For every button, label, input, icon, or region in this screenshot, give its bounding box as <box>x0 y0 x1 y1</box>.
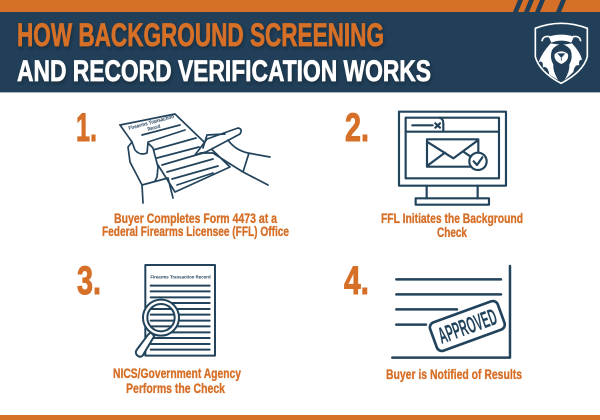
icon: document with magnifier <box>136 265 215 357</box>
caption 4: Buyer is Notified of Results <box>386 366 522 382</box>
bottom bar <box>0 415 600 420</box>
number 4: 4. <box>344 259 369 303</box>
icon: signing form <box>120 114 270 203</box>
icon: signing form: Record <box>147 124 161 133</box>
caption 3 <box>113 365 241 396</box>
icon: monitor with envelope <box>399 112 506 205</box>
caption 2: FFL Initiates the Background <box>381 210 523 226</box>
icon: signing form: Firearms Transaction <box>128 114 175 132</box>
step 4 <box>344 259 522 382</box>
step 1 <box>76 106 289 239</box>
icon: bear shield logo <box>535 23 587 83</box>
caption 1: Federal Firearms Licensee (FFL) Office <box>102 223 289 239</box>
caption 3: NICS/Government Agency <box>113 365 241 381</box>
caption 1 <box>102 210 289 239</box>
icon: document with magnifier: Firearms Transaction Record <box>150 274 211 279</box>
step 2 <box>345 106 523 240</box>
icon: approved stamp document: APPROVED <box>434 304 500 349</box>
title: AND RECORD VERIFICATION WORKS <box>17 55 431 88</box>
step 3 <box>77 259 241 396</box>
title: HOW BACKGROUND SCREENING <box>17 17 384 53</box>
number 2: 2. <box>345 106 369 150</box>
title <box>17 17 431 88</box>
caption 2 <box>381 210 523 240</box>
caption 3: Performs the Check <box>126 380 225 396</box>
caption 1: Buyer Completes Form 4473 at a <box>114 210 277 226</box>
icon: approved stamp document <box>392 266 510 358</box>
number 3: 3. <box>77 259 101 303</box>
number 1: 1. <box>76 106 97 150</box>
caption 2: Check <box>437 224 467 240</box>
header band <box>0 0 600 93</box>
